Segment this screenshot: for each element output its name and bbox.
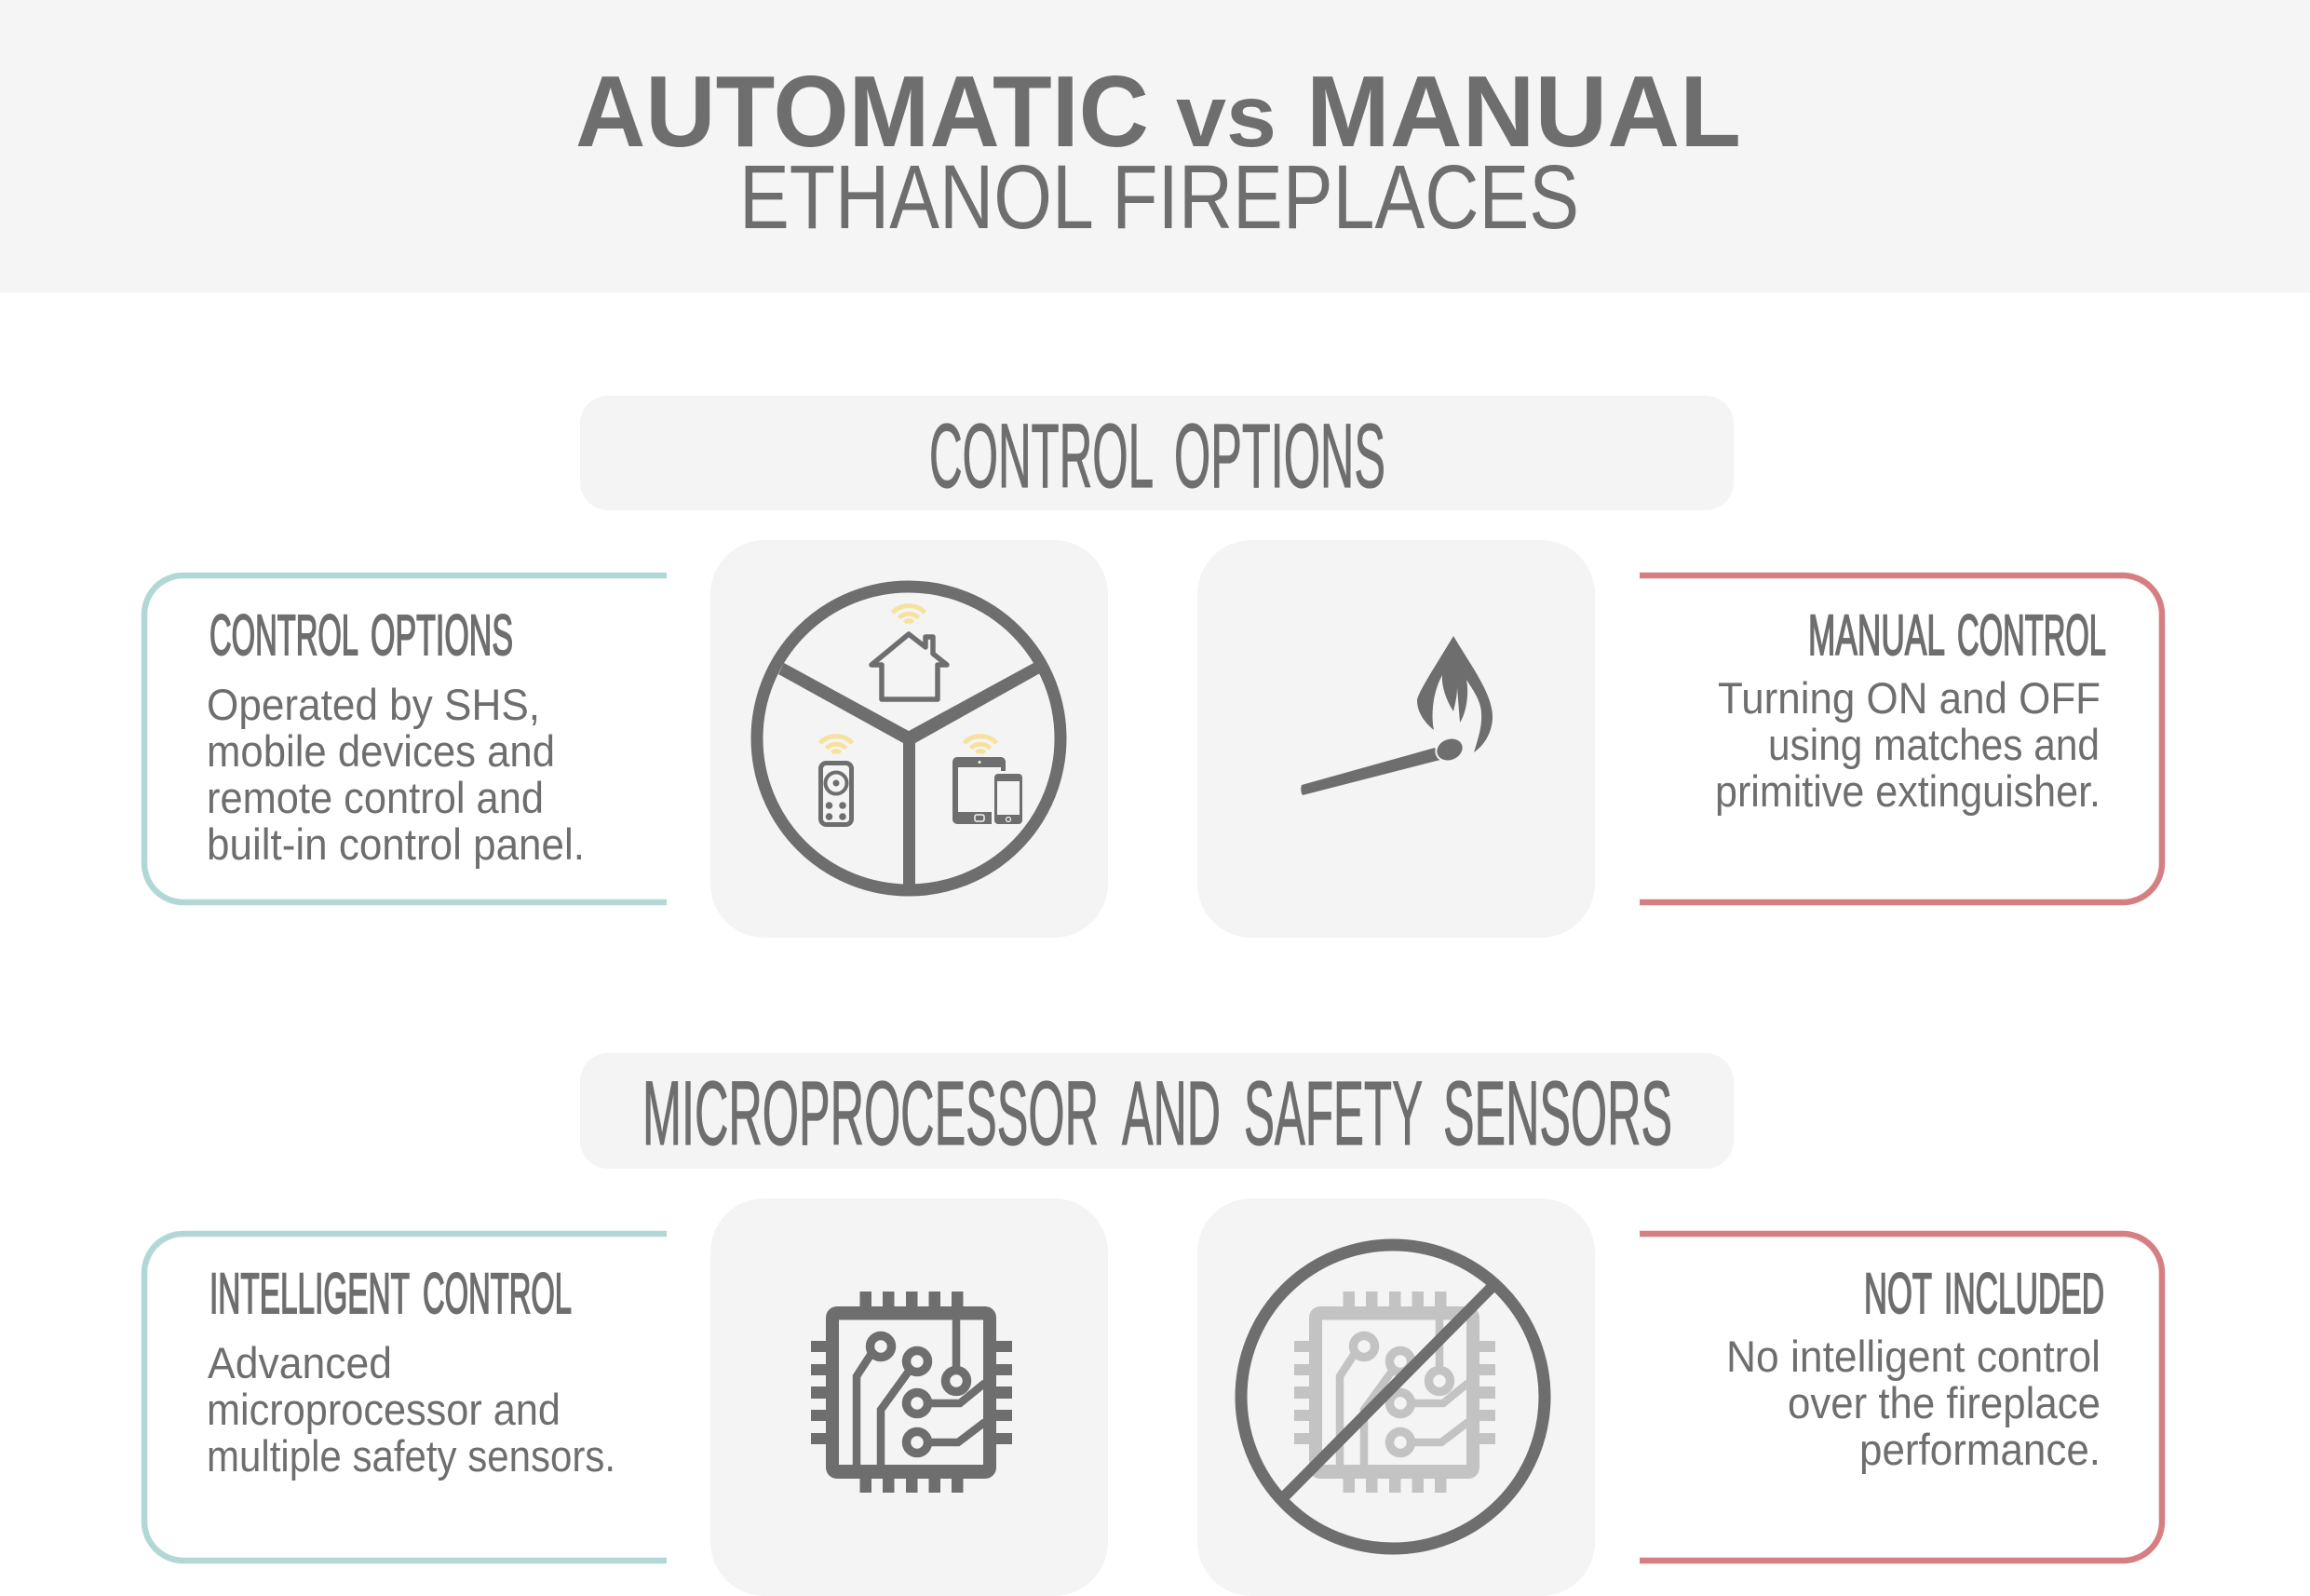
callout heading: INTELLIGENT (209, 1262, 410, 1325)
callout: automatic control options (144, 575, 667, 902)
callout: intelligent control (144, 1234, 667, 1561)
panel: lit match icon (1197, 540, 1595, 938)
icon: faded microchip (1294, 1292, 1495, 1493)
section heading: control options: CONTROL (929, 405, 1154, 507)
callout body: performance. (1859, 1425, 2101, 1474)
header band (0, 0, 2310, 292)
callout body: using matches and (1768, 720, 2100, 769)
callout body (207, 680, 585, 869)
panel: smart control icon (710, 540, 1108, 938)
icon: remote control with wifi (819, 737, 853, 825)
callout body (207, 1338, 615, 1481)
icon: divided circle (757, 587, 1060, 892)
callout heading: MANUAL (1808, 603, 1945, 667)
callout body: built-in control panel. (207, 819, 585, 869)
callout body (1726, 1332, 2101, 1474)
panel: no microprocessor icon (1197, 1198, 1595, 1596)
callout body: microprocessor and (207, 1385, 561, 1434)
callout body: mobile devices and (207, 726, 555, 776)
callout heading: CONTROL (423, 1262, 572, 1325)
callout body: Operated by SHS, (207, 680, 540, 729)
callout body: No intelligent control (1726, 1332, 2101, 1381)
title: AUTOMATIC (575, 55, 1149, 169)
section heading: microprocessor and safety sensors: MICROPROCESSOR (642, 1062, 1099, 1164)
section heading: microprocessor and safety sensors: SAFETY (1244, 1062, 1423, 1164)
callout heading: INCLUDED (1944, 1262, 2104, 1325)
callout body: Turning ON and OFF (1718, 673, 2101, 723)
icon: flame (1417, 636, 1493, 752)
title: vs (1176, 67, 1277, 166)
callout heading: NOT (1864, 1262, 1932, 1325)
icon: tablet and phone with wifi (952, 737, 1024, 827)
callout body: over the fireplace (1788, 1378, 2101, 1427)
panel: microprocessor icon (710, 1198, 1108, 1596)
section heading: microprocessor and safety sensors: AND (1122, 1062, 1221, 1164)
callout heading: CONTROL (1957, 603, 2106, 667)
icon: prohibition sign (1241, 1245, 1545, 1549)
icon: house with wifi (871, 606, 947, 699)
callout: not included (1640, 1234, 2162, 1561)
section heading: microprocessor and safety sensors: SENSORS (1443, 1062, 1672, 1164)
section heading: microprocessor and safety sensors (580, 1053, 1734, 1169)
callout heading: CONTROL (209, 603, 358, 667)
callout body: remote control and (207, 773, 544, 822)
callout: manual control (1640, 575, 2162, 902)
section heading: control options (580, 396, 1734, 510)
icon: microchip (811, 1292, 1012, 1493)
callout body (1715, 673, 2101, 816)
subtitle: ETHANOL FIREPLACES (739, 146, 1579, 248)
callout body: primitive extinguisher. (1715, 766, 2101, 816)
title: MANUAL (1306, 55, 1741, 169)
callout body: multiple safety sensors. (207, 1431, 615, 1481)
callout heading: OPTIONS (371, 603, 513, 667)
callout body: Advanced (208, 1338, 392, 1387)
section heading: control options: OPTIONS (1174, 405, 1385, 507)
icon: matchstick (1301, 734, 1466, 795)
